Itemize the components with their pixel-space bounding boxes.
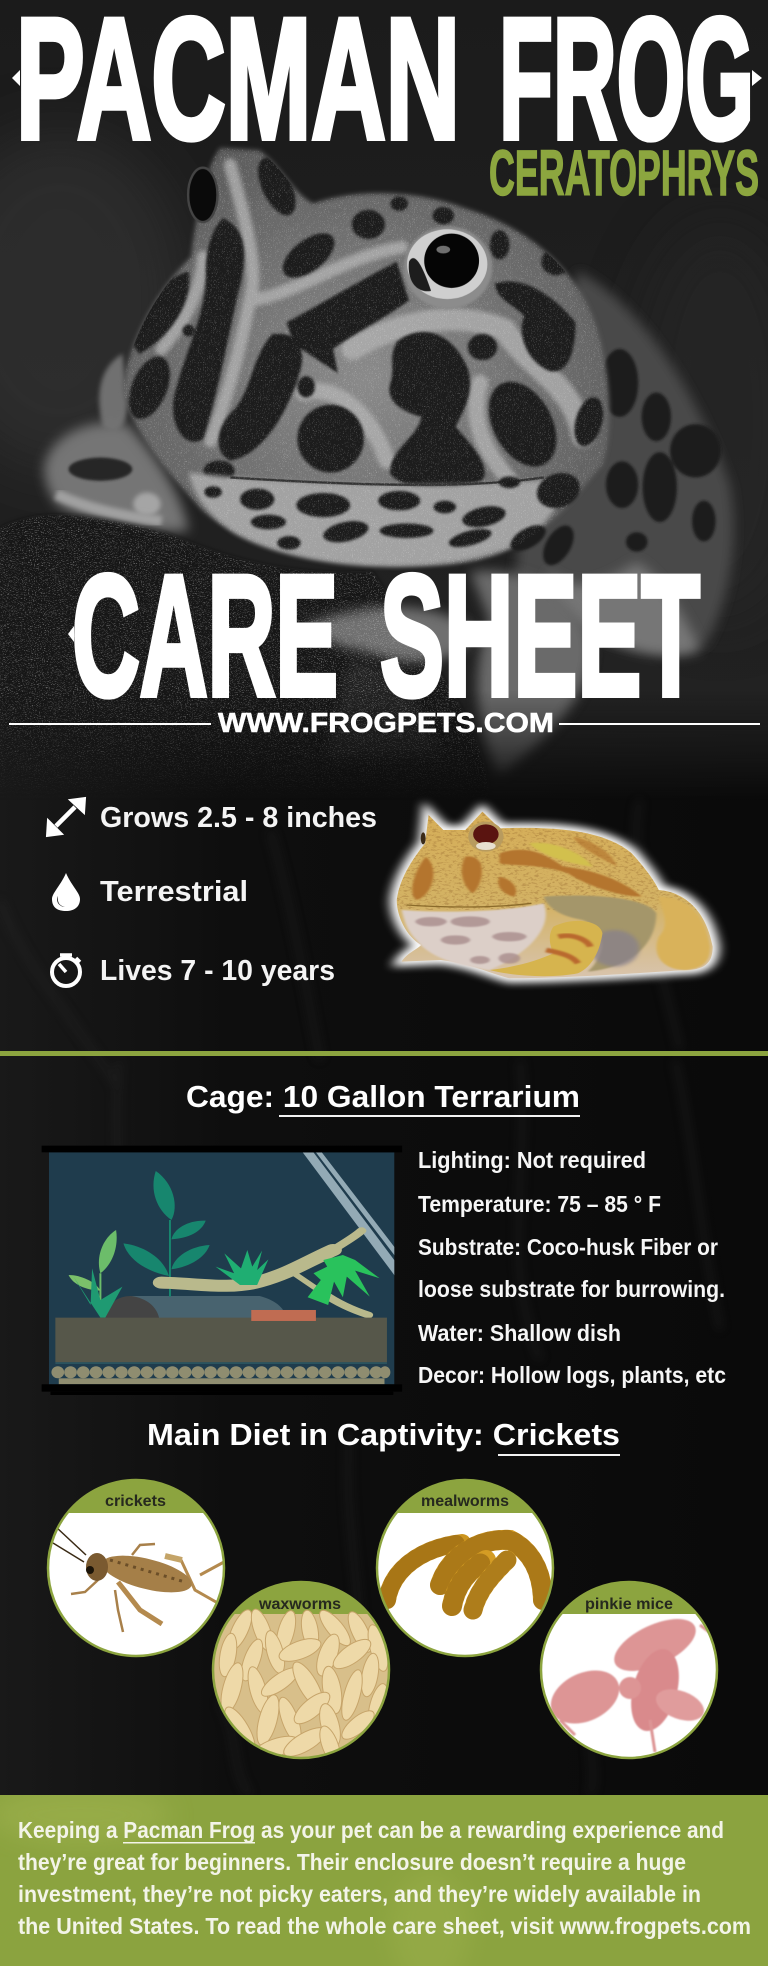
food: crickets (40, 1470, 230, 1656)
rear body (99, 271, 734, 656)
glass reflection (303, 1152, 397, 1278)
glow (397, 812, 713, 978)
stat: habitat: Terrestrial (100, 876, 248, 908)
heading: Care Sheet: CARE (72, 540, 338, 732)
footer text: investment, they’re not picky eaters, and they’re widely available in (18, 1881, 701, 1907)
skin markings (412, 837, 642, 900)
frog sparkles (118, 145, 607, 572)
heading: cage: Cage: 10 Gallon Terrarium (186, 1079, 580, 1114)
food: waxworms (212, 1580, 390, 1760)
lower body (402, 903, 546, 970)
care requirements list: loose substrate for burrowing. (418, 1276, 725, 1302)
mouth and jaw (189, 467, 585, 570)
left arm (44, 423, 189, 531)
mice (550, 1618, 708, 1753)
footer text (18, 1817, 751, 1939)
care requirements list: Water: Shallow dish (418, 1320, 621, 1346)
worm pile (218, 1608, 388, 1756)
branch (162, 1231, 368, 1315)
photo: black and white frog (0, 0, 768, 814)
care requirements list: Temperature: 75 – 85 ° F (418, 1191, 661, 1217)
care requirements list: Substrate: Coco-husk Fiber or (418, 1234, 718, 1260)
eye right (404, 226, 492, 309)
gravel layer (51, 1366, 390, 1384)
left plant (69, 1230, 122, 1318)
footer panel (0, 1785, 768, 1966)
eye left (188, 168, 217, 222)
icon: size arrows (47, 798, 85, 836)
substrate (55, 1318, 387, 1362)
worms (387, 1540, 543, 1610)
log (130, 1296, 287, 1318)
water dish (251, 1310, 316, 1321)
tank frame (42, 1146, 402, 1395)
ground and legs (0, 513, 583, 790)
body (397, 812, 713, 978)
large fern (308, 1255, 380, 1305)
left eye (421, 832, 426, 844)
care requirements list: Lighting: Not required (418, 1147, 646, 1173)
rear leg (656, 897, 710, 970)
stat: size: Grows 2.5 - 8 inches (100, 802, 377, 834)
care requirements list: Decor: Hollow logs, plants, etc (418, 1362, 726, 1388)
icon: water drop (52, 873, 80, 911)
care requirements list (418, 1147, 726, 1388)
food: mealworms: mealworms (421, 1493, 509, 1510)
food: pinkie mice: pinkie mice (585, 1596, 673, 1613)
head (122, 148, 610, 566)
icon: stopwatch (52, 955, 80, 986)
footer text: they’re great for beginners. Their enclosure doesn’t require a huge (18, 1849, 686, 1875)
tall plant (123, 1171, 210, 1297)
light veins on head (162, 165, 583, 480)
cricket (53, 1527, 224, 1632)
front arm (490, 921, 602, 976)
divider: green line (0, 1051, 768, 1056)
dark blotches on head (121, 152, 608, 489)
website url with rules: WWW.FROGPETS.COM (218, 707, 554, 738)
eye (468, 822, 504, 852)
food: pinkie mice (535, 1572, 725, 1758)
food: crickets: crickets (105, 1493, 166, 1510)
heading: main diet: Main Diet in Captivity: Crickets (147, 1417, 620, 1452)
small fern (216, 1250, 268, 1285)
stat: lifespan: Lives 7 - 10 years (100, 955, 335, 987)
mottled skin (397, 812, 696, 910)
photo: orange pacman frog (392, 810, 720, 978)
side speckle (544, 895, 656, 972)
illustration: terrarium (42, 1146, 402, 1395)
food: waxworms: waxworms (258, 1596, 341, 1613)
smoke streaks (0, 800, 720, 1795)
food: mealworms (370, 1470, 560, 1656)
